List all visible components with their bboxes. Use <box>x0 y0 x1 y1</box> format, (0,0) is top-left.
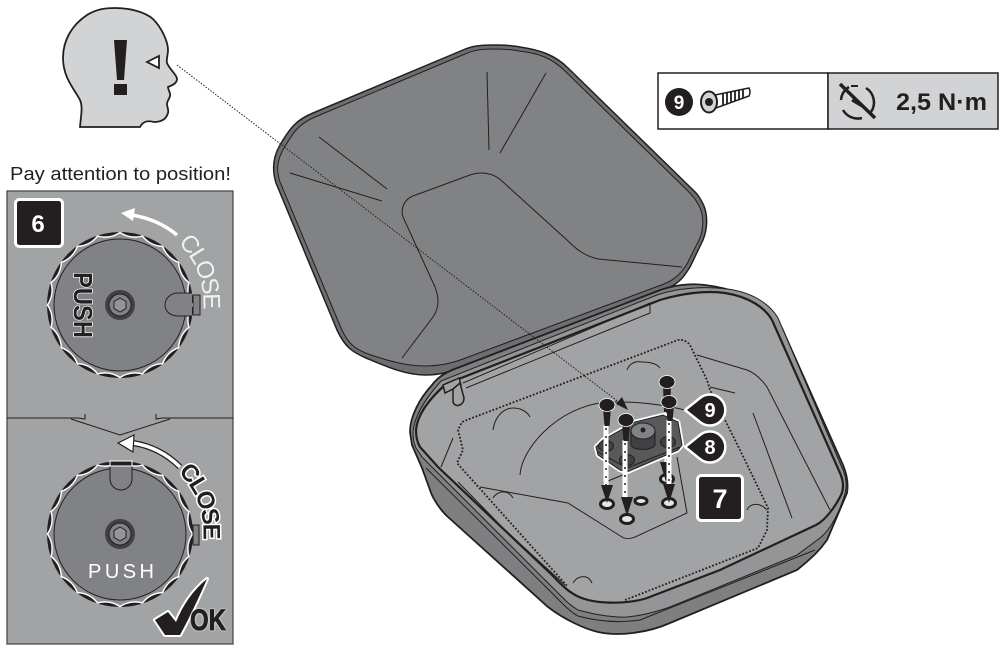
arrow: sight line head <box>616 397 628 410</box>
panel: step 6 position comparison <box>6 190 234 645</box>
callout: part 9: 9 <box>704 400 716 422</box>
heading: pay attention to position: Pay attention to position! <box>10 164 231 184</box>
label: close, incorrect position: CLOSE <box>182 236 220 308</box>
icon: torque wrench <box>840 84 875 119</box>
arrow: close direction, correct position <box>118 435 180 467</box>
label: close, correct position: CLOSE <box>180 463 222 540</box>
dotted sight line from eye to fixing point <box>177 65 620 403</box>
torque specification table <box>658 73 998 129</box>
target holes on the floor <box>600 474 676 524</box>
screw 4 with arrow <box>661 396 677 503</box>
icon: head with attention mark <box>63 8 177 127</box>
icon: ok check mark <box>155 579 226 637</box>
torque value: 2,5 N·m <box>896 89 987 116</box>
lid of the case <box>274 45 707 375</box>
arrow: close direction, incorrect position <box>121 208 177 235</box>
badge: step 7: 7 <box>712 484 728 514</box>
callout: part 8: 8 <box>704 437 716 459</box>
base of the case <box>410 284 848 634</box>
label: push, rotated: PUSH <box>68 272 98 338</box>
callout: part 8 <box>685 432 725 462</box>
label: push: PUSH <box>88 561 154 583</box>
icon: ok check mark: OK <box>190 604 226 637</box>
mounting plate with knob <box>596 415 682 472</box>
screw 2 with arrow <box>618 414 634 516</box>
dial: correct position <box>47 461 199 607</box>
icon: torx screw <box>701 88 750 112</box>
badge: part 9 <box>665 88 693 116</box>
screw 1 with arrow <box>599 398 615 503</box>
badge: step 6: 6 <box>31 211 45 238</box>
badge: step 7 <box>698 476 742 520</box>
badge: part 9: 9 <box>674 93 684 114</box>
screw 3, back <box>659 376 675 482</box>
icon: zipper pull <box>443 378 464 405</box>
dial: incorrect position <box>47 232 200 378</box>
badge: step 6 <box>16 200 62 246</box>
callout: part 9 <box>685 394 725 426</box>
